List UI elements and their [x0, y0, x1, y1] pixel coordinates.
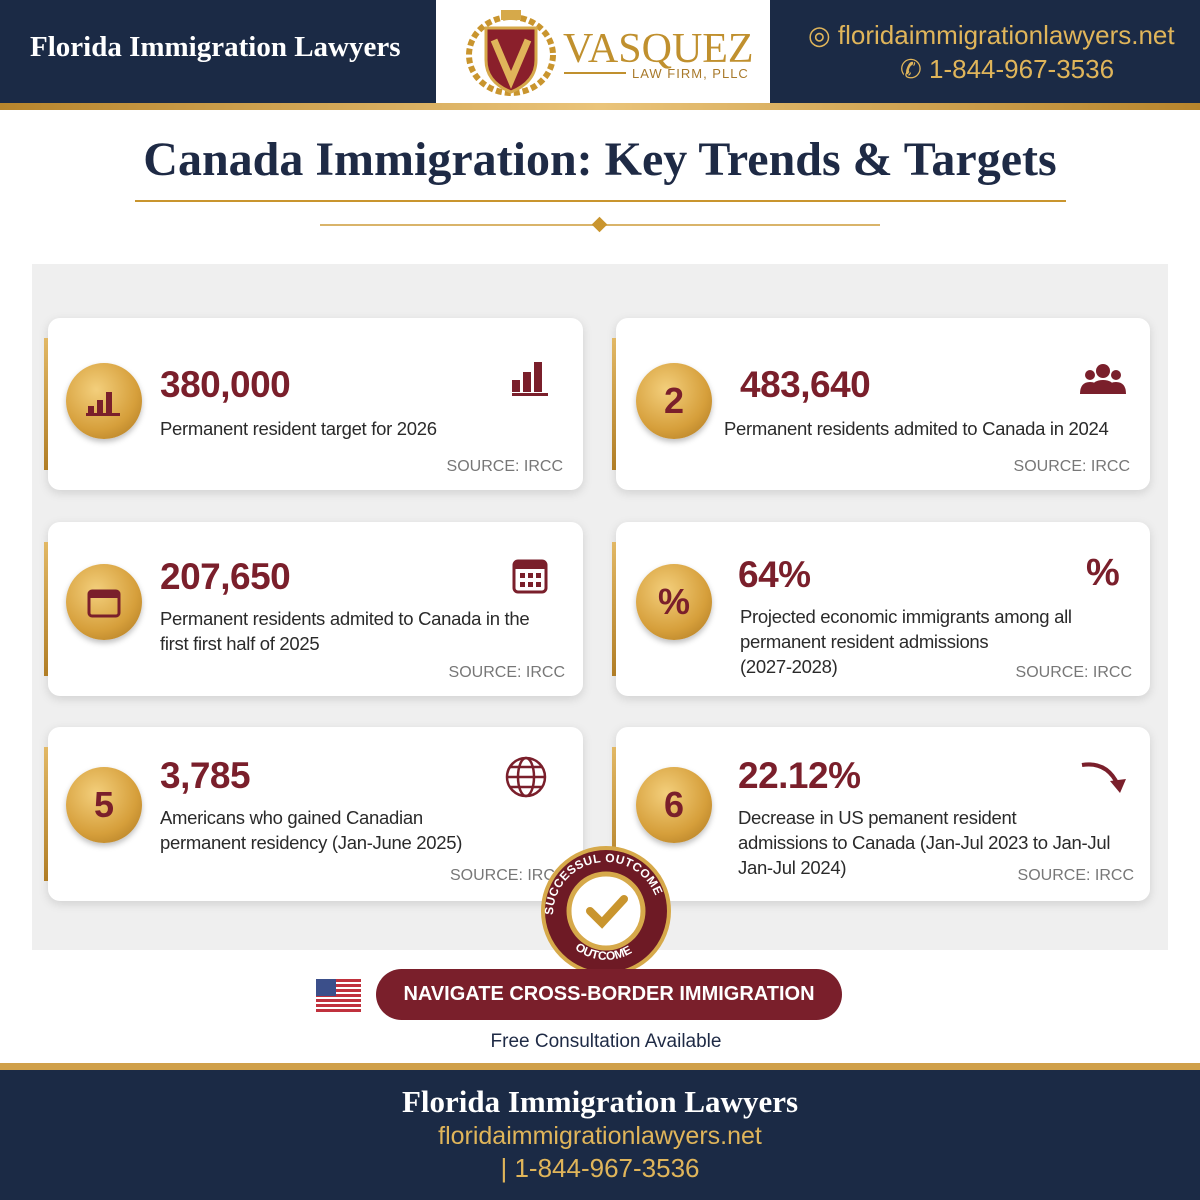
badge: successful outcome: OUTCOME [576, 944, 632, 960]
card 4: Projected economic immigrants among all [740, 606, 1072, 627]
header contact [808, 20, 1175, 84]
card 4: % [658, 581, 690, 622]
card 2: 483,640 [740, 364, 870, 405]
card 4: % [1086, 552, 1120, 594]
main title: Canada Immigration: Key Trends & Targets [143, 133, 1057, 186]
card 6 [616, 727, 1150, 901]
card 2: 2 [664, 380, 684, 421]
flag [316, 979, 361, 1012]
card 6: Decrease in US pemanent resident [738, 807, 1016, 828]
card 4: permanent resident admissions [740, 631, 988, 652]
logo: LAW FIRM, PLLC [632, 66, 749, 81]
card 1: SOURCE: IRCC [447, 458, 563, 475]
card 5: permanent residency (Jan-June 2025) [160, 832, 462, 853]
footer: Florida Immigration Lawyers [402, 1084, 798, 1119]
header title: Florida Immigration Lawyers [30, 31, 401, 63]
card 4: (2027-2028) [740, 656, 838, 677]
card 3 [48, 522, 583, 696]
stats panel [32, 264, 1168, 950]
footer: | 1-844-967-3536 [500, 1153, 700, 1183]
footer: floridaimmigrationlawyers.net [438, 1122, 762, 1150]
footer [0, 1063, 1200, 1200]
card 4 [616, 522, 1150, 696]
card 3: Permanent residents admited to Canada in the [160, 608, 529, 629]
card 2: Permanent residents admited to Canada in 2024 [724, 418, 1109, 439]
header bar [0, 0, 1200, 104]
card 5 [48, 727, 583, 901]
cta button [376, 969, 842, 1020]
header contact: ✆ 1-844-967-3536 [900, 54, 1114, 84]
card 6: 22.12% [738, 755, 860, 796]
card 6: admissions to Canada (Jan-Jul 2023 to Jan-Jul [738, 832, 1110, 853]
card 3: 207,650 [160, 556, 290, 597]
logo: VASQUEZ [563, 26, 754, 72]
card 3: SOURCE: IRCC [449, 664, 565, 681]
card 6: SOURCE: IRCC [1018, 867, 1134, 884]
card 1: 380,000 [160, 364, 290, 405]
badge: successful outcome [541, 846, 671, 969]
card 2: SOURCE: IRCC [1014, 458, 1130, 475]
header contact: ◎ floridaimmigrationlawyers.net [808, 20, 1175, 50]
card 4: 64% [738, 554, 811, 595]
card 1: Permanent resident target for 2026 [160, 418, 437, 439]
badge: successful outcome: SUCCESSUL OUTCOME [544, 854, 663, 915]
card 6: Jan-Jul 2024) [738, 857, 846, 878]
card 5: SOURCE: IRCC [450, 867, 566, 884]
cta button: NAVIGATE CROSS-BORDER IMMIGRATION [403, 983, 815, 1005]
card 3: first first half of 2025 [160, 633, 319, 654]
card 5: Americans who gained Canadian [160, 807, 423, 828]
logo [436, 0, 770, 104]
card 4: SOURCE: IRCC [1016, 664, 1132, 681]
consultation note: Free Consultation Available [491, 1031, 721, 1052]
card 2 [616, 318, 1150, 490]
card 5: 5 [94, 784, 114, 825]
card 6: 6 [664, 784, 684, 825]
card 1 [48, 318, 583, 490]
card 5: 3,785 [160, 755, 250, 796]
